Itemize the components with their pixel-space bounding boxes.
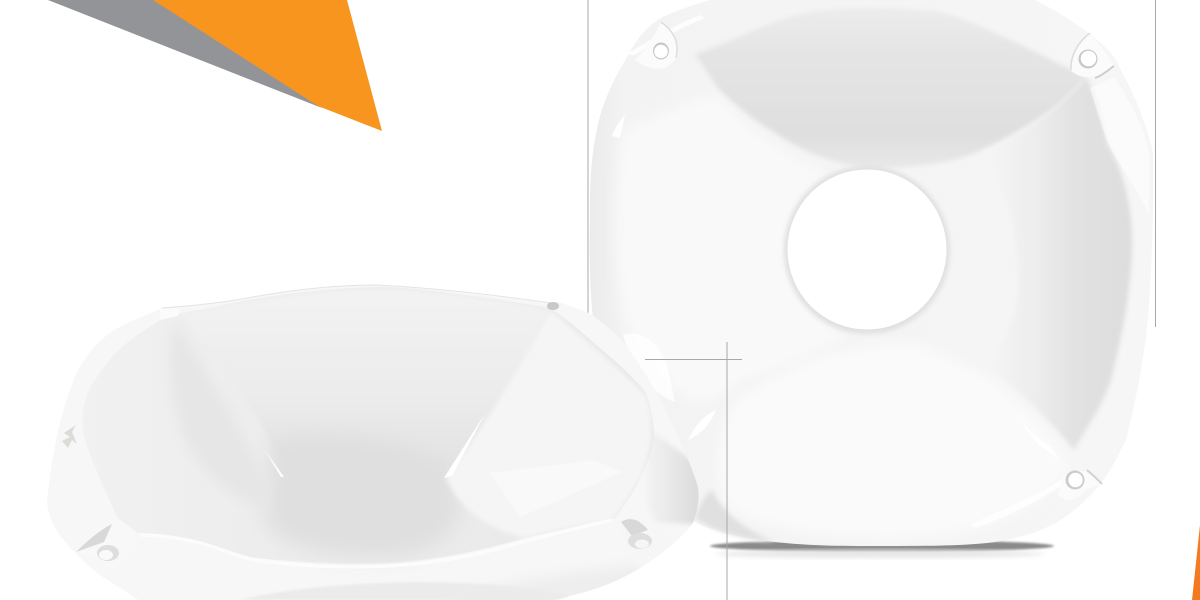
guide line: right horn right edge [1155, 0, 1156, 327]
lower left shade [695, 490, 775, 542]
left horn: angled view [47, 285, 705, 600]
white highlight blade [444, 412, 486, 478]
top petal, grey [695, 8, 1086, 168]
rear rim highlight [162, 285, 552, 308]
throat hole [784, 166, 950, 334]
front underside shade [240, 582, 570, 600]
mounting lug: top right [1071, 33, 1114, 78]
right petal, grey [983, 77, 1132, 450]
bottom petal, bright [717, 344, 1070, 538]
facet reflection diamond [490, 460, 622, 517]
right horn body [590, 0, 1153, 546]
orange corner triangle [153, 0, 382, 131]
grey corner triangle [48, 0, 322, 108]
guide line: horizontal callout [645, 359, 742, 360]
guide line: right horn left edge [588, 0, 589, 325]
left petal, bright [616, 95, 850, 403]
thin highlight [264, 449, 284, 477]
guide line: vertical callout [726, 342, 728, 600]
rear lug: left [160, 308, 180, 320]
bowl floor shade [265, 434, 459, 557]
bowl interior [83, 287, 654, 563]
mounting lug: bottom right [1058, 470, 1102, 500]
rear lug: right [547, 302, 559, 310]
right rim shading [532, 440, 698, 596]
orange sliver bottom right [1192, 525, 1200, 600]
mounting lug: front right [620, 517, 672, 556]
right facet, bright [446, 310, 651, 538]
embossed logo smudge [62, 425, 77, 448]
drop shadow under right horn [710, 540, 1054, 558]
left horn body [47, 285, 699, 600]
front rim lip [140, 520, 612, 567]
bowl left side shade [170, 320, 270, 510]
rim highlights [612, 15, 1149, 528]
right horn: front view [590, 0, 1153, 558]
mounting lug: top left [635, 22, 677, 69]
back wall of bowl [182, 289, 549, 486]
mounting lug: front left [76, 521, 136, 568]
